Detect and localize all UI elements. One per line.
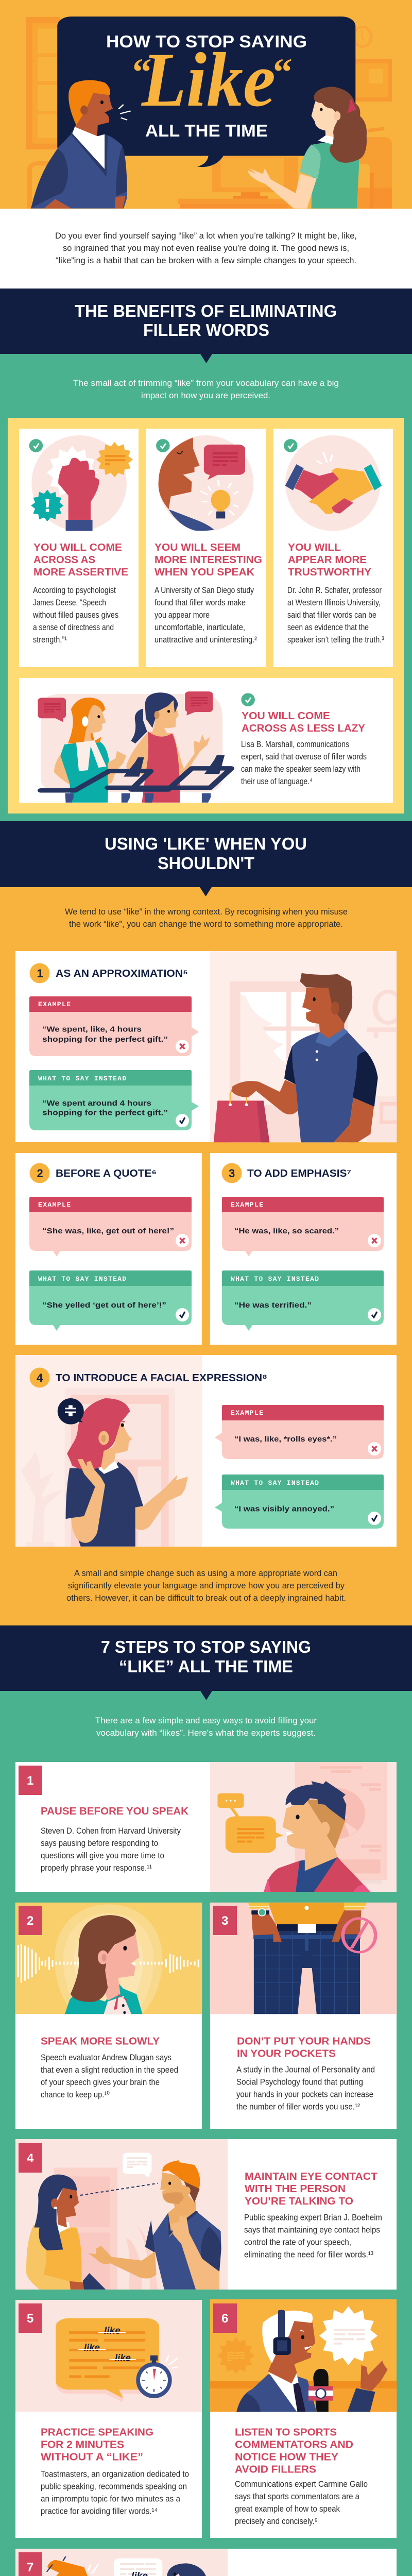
icon: check bbox=[241, 693, 255, 706]
heading: ACROSS AS bbox=[33, 554, 95, 566]
example box bbox=[215, 1405, 384, 1459]
body text: great example of how to speak bbox=[235, 2504, 340, 2514]
what to say instead box bbox=[29, 1270, 192, 1331]
step 3: don't put your hands in your pockets bbox=[210, 1903, 397, 2129]
body text: your hands in your pockets can increase bbox=[236, 2090, 373, 2099]
steps intro: vocabulary with “likes”. Here’s what the experts suggest. bbox=[96, 1728, 316, 1738]
body text: Speech evaluator Andrew Dlugan says bbox=[41, 2053, 171, 2062]
intro text: “like”ing is a habit that can be broken with a few simple changes to your speech. bbox=[56, 256, 356, 265]
card: more interesting bbox=[146, 429, 266, 667]
struck out like words: like bbox=[104, 2326, 121, 2336]
body text bbox=[235, 2479, 368, 2526]
heading: YOU WILL SEEM bbox=[154, 542, 241, 553]
title bbox=[106, 32, 307, 140]
body text: Communications expert Carmine Gallo bbox=[235, 2479, 368, 2489]
body text: seen as evidence that the bbox=[287, 622, 369, 632]
steps intro: There are a few simple and easy ways to avoid filling your bbox=[95, 1716, 317, 1725]
step 6: listen to sports commentators bbox=[210, 2299, 397, 2538]
struck out like words: like bbox=[115, 2353, 131, 2364]
heading: TRUSTWORTHY bbox=[288, 567, 372, 578]
section: steps background bbox=[0, 1691, 412, 2576]
heading: MORE ASSERTIVE bbox=[33, 567, 128, 578]
heading bbox=[235, 2427, 353, 2475]
step 5: practice speaking for 2 minutes bbox=[15, 2300, 202, 2538]
icon: raised fist bbox=[29, 435, 133, 531]
illustration: annoyed woman bbox=[21, 1388, 188, 1547]
misuse summary text: others. However, it can be difficult to break out of a deeply ingrained habit. bbox=[66, 1593, 346, 1603]
body text: Public speaking expert Brian J. Boeheim bbox=[244, 2212, 382, 2223]
intro text bbox=[55, 231, 357, 265]
heading: LISTEN TO SPORTS bbox=[235, 2427, 337, 2438]
illustration: man with shopping bag bbox=[214, 973, 402, 1142]
body text: Lisa B. Marshall, communications bbox=[241, 739, 349, 749]
heading: YOU WILL COME bbox=[33, 542, 122, 553]
body text: precisely and concisely.⁹ bbox=[235, 2516, 318, 2526]
body text bbox=[154, 585, 257, 645]
illustration: two friends talking bbox=[46, 2556, 206, 2576]
body text: says that maintaining eye contact helps bbox=[244, 2225, 380, 2235]
body text: of your speech gives your brain the bbox=[41, 2077, 160, 2087]
heading: ACROSS AS LESS LAZY bbox=[242, 723, 366, 734]
panel: benefits bbox=[8, 418, 404, 814]
body text: found that filler words make bbox=[154, 598, 246, 607]
intro text: Do you ever find yourself saying “like” a lot when you’re talking? It might be, like, bbox=[55, 231, 357, 241]
badge: 3: 3 bbox=[229, 1167, 235, 1180]
what to say instead box: “We spent around 4 hours bbox=[42, 1099, 151, 1108]
example box: EXAMPLE bbox=[231, 1201, 263, 1209]
number tag bbox=[213, 1906, 237, 1935]
illustration: two people making eye contact bbox=[26, 2153, 221, 2290]
number tag bbox=[19, 2303, 42, 2333]
number tag: 3 bbox=[221, 1914, 228, 1928]
body text bbox=[244, 2212, 382, 2260]
body text: said that filler words can be bbox=[287, 610, 376, 620]
body text bbox=[41, 2053, 178, 2099]
body text: the number of filler words you use.¹² bbox=[236, 2102, 360, 2111]
step 2: speak more slowly bbox=[15, 1903, 202, 2129]
number tag bbox=[19, 2552, 42, 2576]
body text: questions will give you more time to bbox=[41, 1851, 164, 1860]
example box: “She was, like, get out of here!” bbox=[42, 1227, 174, 1235]
heading: the benefits of eliminating filler words bbox=[0, 289, 412, 363]
number tag: 1 bbox=[27, 1774, 33, 1788]
body text: you appear more bbox=[154, 610, 210, 620]
icon: handshake bbox=[284, 435, 382, 531]
heading: TO ADD EMPHASIS⁷ bbox=[247, 1168, 351, 1179]
misuse intro: the work “like”, you can change the word to something more appropriate. bbox=[69, 919, 343, 929]
step 1: pause before you speak bbox=[15, 1762, 397, 1892]
heading: PAUSE BEFORE YOU SPEAK bbox=[41, 1806, 189, 1817]
heading: PRACTICE SPEAKING bbox=[41, 2427, 153, 2438]
example box: EXAMPLE bbox=[231, 1409, 263, 1417]
example box: “I was, like, *rolls eyes*.” bbox=[234, 1435, 337, 1444]
heading: DON’T PUT YOUR HANDS bbox=[237, 2036, 371, 2047]
card: more trustworthy bbox=[273, 429, 393, 667]
steps intro bbox=[95, 1716, 317, 1738]
body text: chance to keep up.¹⁰ bbox=[41, 2090, 110, 2099]
example box bbox=[29, 1197, 192, 1257]
body text: says that sports commentators are a bbox=[235, 2492, 359, 2501]
benefits intro: impact on how you are perceived. bbox=[141, 391, 270, 400]
icon: speaking head with lightbulb bbox=[156, 435, 253, 531]
heading: using like when you shouldn't: SHOULDN'T bbox=[158, 854, 254, 873]
heading: WITHOUT A “LIKE” bbox=[41, 2451, 143, 2463]
body text bbox=[287, 585, 384, 645]
heading bbox=[237, 2036, 371, 2060]
benefits intro bbox=[73, 378, 339, 400]
body text: A University of San Diego study bbox=[154, 585, 254, 595]
body text: strength,”¹ bbox=[33, 635, 67, 645]
body text bbox=[41, 2469, 189, 2516]
body text: properly phrase your response.¹¹ bbox=[41, 1863, 152, 1873]
body text: James Deese, “Speech bbox=[33, 598, 106, 607]
body text: Social Psychology found that putting bbox=[236, 2077, 363, 2087]
intro text: so ingrained that you may not even realise you’re doing it. The good news is, bbox=[63, 243, 349, 253]
section: benefits background bbox=[0, 354, 412, 821]
benefits intro: The small act of trimming “like” from your vocabulary can have a big bbox=[73, 378, 339, 388]
heading: the benefits of eliminating filler words: THE BENEFITS OF ELIMINATING bbox=[75, 301, 337, 320]
example box bbox=[222, 1197, 384, 1257]
card: less lazy bbox=[19, 678, 393, 803]
body text: control the rate of your speech, bbox=[244, 2237, 351, 2247]
misuse intro bbox=[65, 907, 348, 929]
heading bbox=[242, 710, 366, 734]
card: more assertive bbox=[19, 429, 139, 667]
number tag bbox=[19, 1906, 42, 1935]
body text: uncomfortable, inarticulate, bbox=[154, 622, 245, 632]
misuse summary text: A small and simple change such as using a more appropriate word can bbox=[74, 1568, 337, 1578]
example box: EXAMPLE bbox=[38, 1201, 71, 1209]
body text: speaker isn’t telling the truth.³ bbox=[287, 635, 384, 645]
body text: unattractive and uninteresting.² bbox=[154, 635, 257, 645]
heading: AVOID FILLERS bbox=[235, 2464, 316, 2475]
example box bbox=[29, 996, 199, 1056]
badge: 4: 4 bbox=[37, 1371, 43, 1384]
heading: using like when you shouldn't bbox=[0, 821, 412, 896]
body text: at Western Illinois University, bbox=[287, 598, 381, 607]
what to say instead box bbox=[29, 1070, 199, 1130]
illustration: man speaking bbox=[31, 80, 131, 209]
speech bubble bbox=[57, 16, 355, 167]
heading: IN YOUR POCKETS bbox=[237, 2048, 336, 2060]
badge: 1: 1 bbox=[37, 967, 43, 980]
heading: YOU WILL bbox=[288, 542, 341, 553]
what to say instead box: “I was visibly annoyed.” bbox=[234, 1504, 334, 1514]
body text: Steven D. Cohen from Harvard University bbox=[41, 1826, 181, 1836]
heading bbox=[154, 542, 262, 578]
badge: 1 bbox=[30, 963, 49, 983]
title: “ bbox=[132, 51, 151, 94]
what to say instead box: WHAT TO SAY INSTEAD bbox=[231, 1275, 319, 1283]
section: misuse background bbox=[0, 887, 412, 1625]
body text bbox=[241, 739, 367, 786]
heading: 7 steps to stop saying like all the time: “LIKE” ALL THE TIME bbox=[119, 1657, 293, 1676]
body text bbox=[236, 2065, 375, 2111]
heading: MORE INTERESTING bbox=[154, 554, 262, 566]
number tag: 4 bbox=[27, 2151, 34, 2165]
heading: NOTICE HOW THEY bbox=[235, 2451, 339, 2463]
example box: EXAMPLE bbox=[38, 1001, 71, 1008]
body text: practice for avoiding filler words.¹⁴ bbox=[41, 2506, 158, 2516]
panel: 2 before a quote bbox=[15, 1153, 202, 1345]
what to say instead box: shopping for the perfect gift.” bbox=[42, 1109, 168, 1117]
number tag bbox=[19, 2143, 42, 2173]
heading: COMMENTATORS AND bbox=[235, 2439, 353, 2450]
illustration: man pausing bbox=[217, 1762, 387, 1892]
body text: Toastmasters, an organization dedicated to bbox=[41, 2469, 189, 2479]
title: ALL THE TIME bbox=[145, 121, 268, 140]
example box: “We spent, like, 4 hours bbox=[42, 1025, 142, 1033]
heading bbox=[245, 2171, 377, 2207]
heading: MAINTAIN EYE CONTACT bbox=[245, 2171, 377, 2182]
body text bbox=[32, 585, 118, 645]
struck out like words bbox=[78, 2326, 136, 2364]
heading: APPEAR MORE bbox=[288, 554, 367, 566]
title: Like bbox=[141, 37, 276, 123]
body text: a sense of directness and bbox=[33, 622, 114, 632]
body text: A study in the Journal of Personality and bbox=[236, 2065, 375, 2074]
illustration: woman listening bbox=[248, 87, 367, 209]
struck out like words: like bbox=[84, 2343, 100, 2353]
number tag bbox=[213, 2303, 237, 2333]
what to say instead box: WHAT TO SAY INSTEAD bbox=[38, 1275, 126, 1283]
what to say instead box: “He was terrified.” bbox=[234, 1301, 312, 1310]
heading: AS AN APPROXIMATION⁵ bbox=[56, 968, 188, 979]
body text: expert, said that overuse of filler words bbox=[241, 752, 367, 761]
body text: their use of language.⁴ bbox=[241, 776, 313, 786]
example box: shopping for the perfect gift.” bbox=[42, 1035, 168, 1044]
body text: Dr. John R. Schafer, professor bbox=[287, 585, 382, 595]
misuse intro: We tend to use “like” in the wrong context. By recognising when you misuse bbox=[65, 907, 348, 917]
step 4: maintain eye contact bbox=[15, 2139, 397, 2290]
body text: public speaking, recommends speaking on bbox=[41, 2481, 187, 2492]
body text: an impromptu topic for two minutes as a bbox=[41, 2494, 180, 2504]
heading: YOU WILL COME bbox=[242, 710, 330, 722]
what to say instead box bbox=[222, 1270, 384, 1331]
misuse summary text: significantly elevate your language and improve how you are perceived by bbox=[68, 1581, 345, 1590]
heading: WITH THE PERSON bbox=[245, 2183, 346, 2195]
illustration: woman speaking slowly bbox=[15, 1903, 202, 2014]
heading bbox=[33, 542, 128, 578]
heading: TO INTRODUCE A FACIAL EXPRESSION⁸ bbox=[56, 1372, 267, 1384]
body text: eliminating the need for filler words.¹³ bbox=[244, 2249, 373, 2260]
panel: 1 as an approximation bbox=[15, 951, 402, 1142]
number tag: 6 bbox=[221, 2312, 228, 2326]
what to say instead box bbox=[215, 1475, 384, 1529]
heading: using like when you shouldn't: USING 'LIKE' WHEN YOU bbox=[105, 834, 307, 853]
panel: 3 to add emphasis bbox=[210, 1153, 397, 1345]
badge: 4 bbox=[30, 1367, 49, 1388]
body text bbox=[41, 1826, 181, 1873]
body text: can make the speaker seem lazy with bbox=[241, 764, 360, 774]
heading: 7 steps to stop saying like all the time bbox=[0, 1625, 412, 1700]
what to say instead box: “She yelled ‘get out of here’!” bbox=[42, 1301, 166, 1310]
panel: 4 to introduce a facial expression bbox=[15, 1355, 397, 1547]
office background bbox=[26, 17, 392, 209]
step 7: ask a friend bbox=[15, 2549, 397, 2576]
body text: without filled pauses gives bbox=[32, 610, 118, 620]
heading: 7 steps to stop saying like all the time: 7 STEPS TO STOP SAYING bbox=[101, 1637, 311, 1656]
badge: 2 bbox=[30, 1163, 49, 1183]
number tag: 2 bbox=[27, 1914, 33, 1928]
body text: According to psychologist bbox=[33, 585, 116, 595]
what to say instead box: WHAT TO SAY INSTEAD bbox=[231, 1479, 319, 1487]
hero banner bbox=[0, 0, 412, 209]
number tag bbox=[19, 1766, 42, 1795]
example box: “He was, like, so scared.” bbox=[234, 1227, 339, 1235]
heading: BEFORE A QUOTE⁶ bbox=[56, 1168, 157, 1179]
heading bbox=[41, 2427, 153, 2463]
heading: WHEN YOU SPEAK bbox=[154, 567, 255, 578]
title: “ bbox=[273, 51, 293, 94]
heading: the benefits of eliminating filler words: FILLER WORDS bbox=[143, 320, 269, 340]
heading: YOU’RE TALKING TO bbox=[245, 2196, 353, 2207]
illustration: hands in pockets bbox=[210, 1903, 397, 2014]
illustration: two women on treadmills bbox=[38, 691, 231, 803]
heading: SPEAK MORE SLOWLY bbox=[41, 2036, 160, 2047]
badge: 3 bbox=[221, 1163, 242, 1183]
badge: 2: 2 bbox=[37, 1167, 43, 1180]
illustration: sports commentator bbox=[210, 2306, 397, 2412]
body text: that even a slight reduction in the speed bbox=[41, 2065, 178, 2075]
heading: FOR 2 MINUTES bbox=[41, 2439, 124, 2450]
heading bbox=[288, 542, 372, 578]
what to say instead box: WHAT TO SAY INSTEAD bbox=[38, 1075, 126, 1082]
misuse summary text bbox=[66, 1568, 346, 1603]
number tag: 5 bbox=[27, 2312, 33, 2326]
title: HOW TO STOP SAYING bbox=[106, 32, 307, 51]
body text: says pausing before responding to bbox=[41, 1838, 158, 1848]
illustration: speech bubble and stopwatch bbox=[56, 2318, 178, 2402]
number tag: 7 bbox=[27, 2561, 33, 2574]
